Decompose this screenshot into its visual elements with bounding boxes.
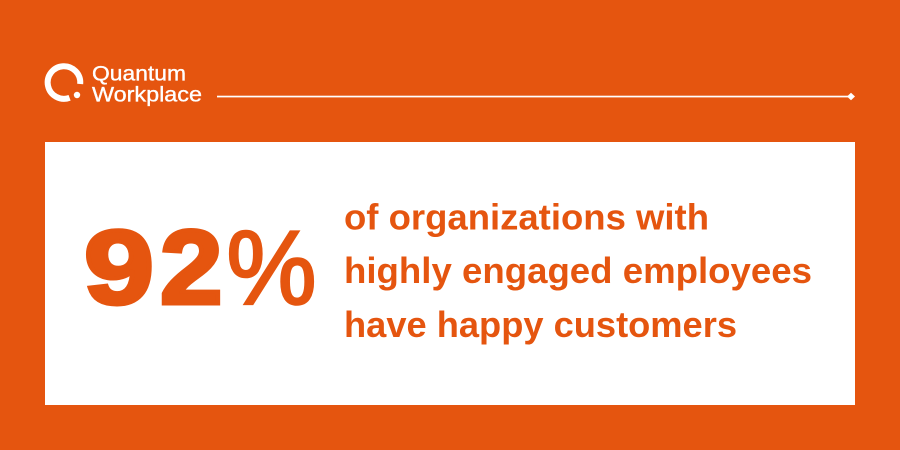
statement text: of organizations with [344, 196, 709, 238]
wordmark: Quantum [92, 62, 186, 86]
header rule with diamond end [217, 93, 855, 100]
big number: 92%: % [226, 210, 316, 327]
icon: ring with dot [48, 66, 80, 99]
statement text: have happy customers [344, 304, 737, 345]
big number: 92% [84, 210, 316, 327]
big number: 92%: 2 [160, 210, 222, 326]
statement text [344, 196, 812, 345]
big number: 92%: 9 [84, 210, 154, 326]
wordmark: Workplace [92, 84, 202, 107]
panel: statistic card [45, 142, 855, 405]
wordmark [92, 62, 202, 107]
logo: Quantum Workplace [48, 62, 202, 107]
statement text: highly engaged employees [344, 250, 812, 291]
